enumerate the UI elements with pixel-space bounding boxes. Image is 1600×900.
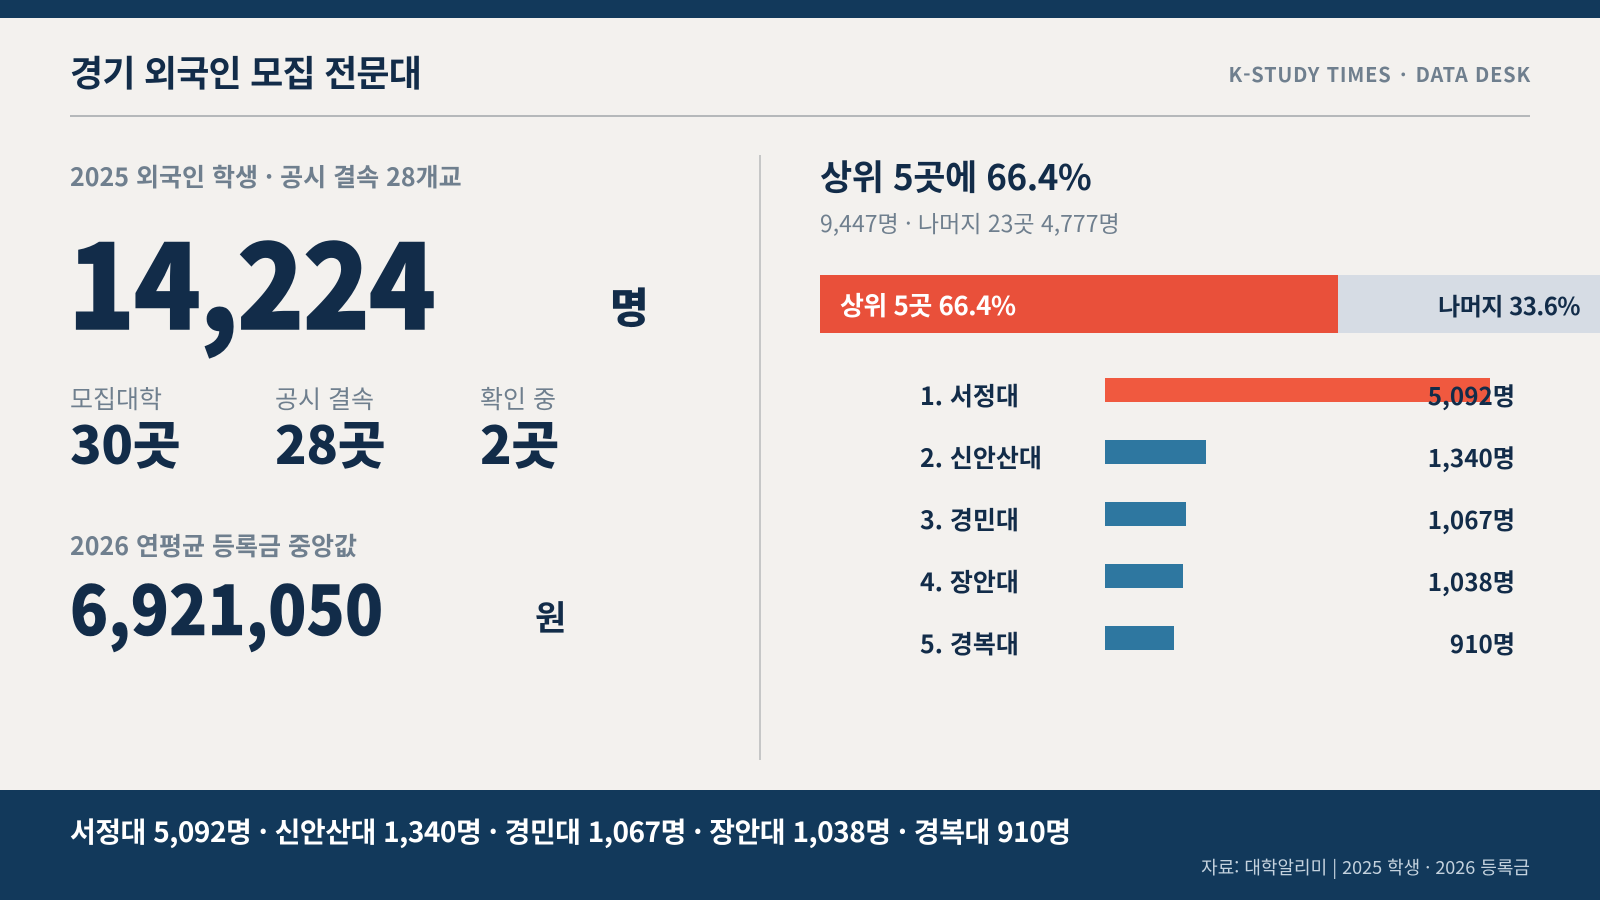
big number: students: 14,224 [68, 195, 434, 363]
students label: 2025 외국인 학생 · 공시 결속 28개교 [70, 158, 462, 194]
panel: top five share: 1,038명 [1428, 562, 1515, 598]
row 2: 2. 신안산대 [920, 439, 1042, 475]
row 4 [920, 562, 1515, 599]
vertical divider [759, 155, 761, 760]
stat: being checked: 2곳 [480, 404, 559, 479]
segment: top five: 상위 5곳 66.4% [840, 286, 1015, 323]
share heading: 상위 5곳에 66.4% [820, 150, 1091, 201]
panel: top five share: 910명 [1450, 624, 1515, 660]
source note: 자료: 대학알리미 | 2025 학생 · 2026 등록금 [1201, 854, 1530, 880]
segment: the rest [1338, 275, 1600, 333]
row 3: 3. 경민대 [920, 501, 1019, 537]
stat: recruiting colleges: 30곳 [70, 404, 180, 479]
unit: people: 명 [610, 275, 649, 336]
panel: top five share: 1,067명 [1428, 500, 1515, 536]
row 4: 4. 장안대 [920, 563, 1019, 599]
stat: missing disclosure: 공시 결속 [275, 380, 374, 416]
row 2 [920, 438, 1515, 475]
row 1 [920, 376, 1515, 413]
big number: tuition: 6,921,050 [70, 556, 383, 655]
panel: top five share [820, 150, 1600, 661]
header rule [70, 115, 1530, 117]
row 5: 5. 경복대 [920, 625, 1019, 661]
share subheading: 9,447명 · 나머지 23곳 4,777명 [820, 205, 1120, 239]
stat: being checked: 확인 중 [480, 380, 556, 416]
top bar [0, 0, 1600, 18]
panel: top five share: 5,092명 [1428, 376, 1515, 412]
unit: won: 원 [535, 591, 566, 640]
panel: top five share: 1,340명 [1428, 438, 1515, 474]
segment: top five [820, 275, 1338, 333]
footer summary: 서정대 5,092명 · 신안산대 1,340명 · 경민대 1,067명 · 장안대 1,038명 · 경복대 910명 [70, 811, 1071, 851]
stat: missing disclosure: 28곳 [275, 404, 385, 479]
row 3 [920, 500, 1515, 537]
publisher label: K-STUDY TIMES · DATA DESK [1229, 59, 1531, 88]
tuition label: 2026 연평균 등록금 중앙값 [70, 527, 357, 563]
ranking chart [920, 376, 1515, 661]
stacked share bar [820, 275, 1600, 333]
segment: the rest: 나머지 33.6% [1438, 287, 1580, 322]
title: 경기 외국인 모집 전문대 [70, 45, 421, 97]
panel: left key figures [68, 158, 649, 655]
footer band [0, 790, 1600, 900]
row 1: 1. 서정대 [920, 377, 1019, 413]
row 5 [920, 624, 1515, 661]
stat: recruiting colleges: 모집대학 [70, 380, 162, 416]
